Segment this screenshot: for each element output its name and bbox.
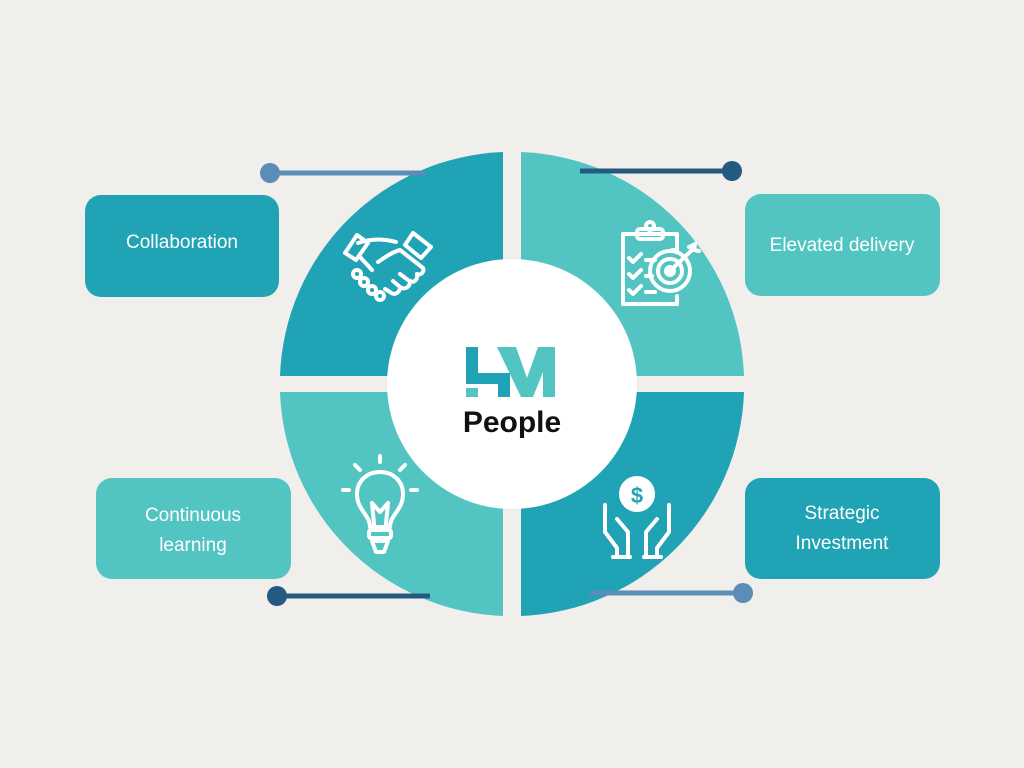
box: Collaboration: Collaboration — [126, 232, 238, 253]
connector: top-left — [260, 163, 425, 183]
box: Strategic Investment: Investment — [796, 533, 889, 554]
quadrant: bottom-left — [280, 392, 503, 616]
logo — [466, 347, 555, 397]
quadrant: top-right — [521, 152, 744, 376]
box: Continuous learning — [96, 478, 291, 579]
box: Continuous learning: Continuous — [145, 505, 241, 526]
box: Continuous learning: learning — [159, 535, 227, 556]
box: Elevated delivery — [745, 194, 940, 296]
icon: hands with dollar — [605, 478, 669, 557]
connector: bottom-left — [267, 586, 430, 606]
box: Elevated delivery: Elevated delivery — [770, 235, 915, 256]
center circle — [387, 259, 637, 509]
icon: light bulb — [343, 456, 417, 552]
box: Strategic Investment: Strategic — [805, 503, 879, 524]
icon: clipboard target — [623, 222, 699, 304]
icon: hands with dollar: $ — [631, 483, 643, 508]
box: Strategic Investment — [745, 478, 940, 579]
connector: bottom-right — [590, 583, 753, 603]
quadrant: bottom-right — [521, 392, 744, 616]
box: Collaboration — [85, 195, 279, 297]
quadrant: top-left — [280, 152, 503, 376]
logo text: People: People — [463, 406, 561, 439]
icon: handshake — [345, 233, 431, 300]
connector: top-right — [580, 161, 742, 181]
